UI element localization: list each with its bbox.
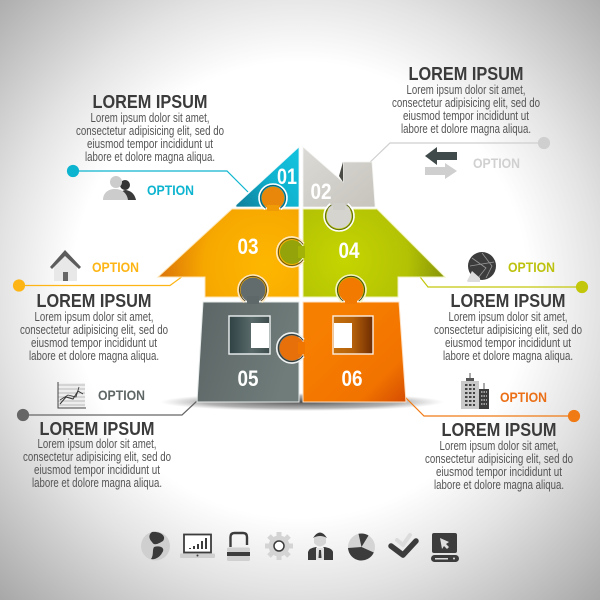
body: Lorem ipsum dolor sit amet, bbox=[90, 111, 210, 125]
body: labore et dolore magna aliqua. bbox=[401, 122, 531, 136]
option label 01: OPTION bbox=[147, 182, 194, 198]
piece 04 bbox=[303, 209, 445, 297]
icon: earth bbox=[141, 532, 170, 560]
connector 03 bbox=[14, 265, 198, 291]
heading: LOREM IPSUM bbox=[408, 63, 524, 84]
puzzle tab: orange into 01 bbox=[259, 184, 287, 211]
house shadow bbox=[160, 393, 444, 411]
body: consectetur adipisicing elit, sed do bbox=[20, 323, 168, 337]
heading: LOREM IPSUM bbox=[442, 419, 556, 440]
bottom icon row bbox=[141, 532, 459, 562]
piece 02 bbox=[303, 147, 375, 207]
puzzle tab: orange into 05 bbox=[277, 333, 305, 363]
piece 06: 06 bbox=[342, 366, 362, 391]
text block: top left bbox=[76, 91, 224, 164]
icon: businessman bbox=[308, 532, 333, 560]
icon: chart bbox=[58, 382, 86, 408]
text block: bottom left bbox=[23, 418, 171, 490]
piece 01: 01 bbox=[277, 164, 297, 189]
icon: globe bbox=[467, 252, 496, 282]
piece 05 bbox=[197, 302, 299, 402]
heading: LOREM IPSUM bbox=[36, 290, 152, 311]
puzzle tab: green into 03 bbox=[277, 237, 305, 267]
icon: people bbox=[103, 176, 136, 200]
icon: computer bbox=[431, 533, 459, 562]
body: eiusmod tempor incididunt ut bbox=[87, 137, 213, 151]
body: consectetur adipisicing elit, sed do bbox=[76, 124, 224, 138]
option label 04: OPTION bbox=[508, 259, 555, 275]
connector lines bbox=[14, 138, 588, 422]
connector 06 bbox=[400, 392, 580, 422]
body: labore et dolore magna aliqua. bbox=[85, 150, 215, 164]
body: consectetur adipisicing elit, sed do bbox=[392, 96, 540, 110]
body bbox=[23, 437, 171, 490]
body: labore et dolore magna aliqua. bbox=[434, 478, 564, 492]
icon: open lock bbox=[227, 533, 250, 561]
icon: arrows bbox=[425, 147, 457, 179]
icon: gear bbox=[265, 532, 293, 560]
window 06 bbox=[333, 316, 373, 354]
icon: pie chart bbox=[348, 533, 375, 561]
heading: LOREM IPSUM bbox=[450, 290, 566, 311]
icon: house bbox=[50, 250, 81, 281]
puzzle tab: grey into 03 bbox=[238, 275, 268, 304]
piece 03 bbox=[158, 209, 299, 297]
text block: middle left bbox=[20, 290, 168, 363]
puzzle tab: grey into 04 bbox=[324, 203, 354, 231]
body: eiusmod tempor incididunt ut bbox=[403, 109, 529, 123]
connector 01 bbox=[68, 166, 248, 192]
piece 01 bbox=[236, 147, 299, 207]
text block: top right bbox=[392, 63, 540, 136]
option label 02: OPTION bbox=[473, 155, 520, 171]
heading: LOREM IPSUM bbox=[92, 91, 208, 112]
icon: laptop chart bbox=[180, 534, 215, 558]
body bbox=[76, 111, 224, 164]
piece 04: 04 bbox=[338, 238, 360, 263]
body bbox=[434, 310, 582, 363]
body: Lorem ipsum dolor sit amet, bbox=[406, 83, 526, 97]
connector 04 bbox=[413, 268, 588, 292]
option label 06: OPTION bbox=[500, 389, 547, 405]
body: eiusmod tempor incididunt ut bbox=[31, 336, 157, 350]
piece 02: 02 bbox=[310, 179, 332, 204]
option label 03: OPTION bbox=[92, 259, 139, 275]
window 05 bbox=[229, 316, 270, 354]
connector 05 bbox=[18, 401, 197, 420]
body: Lorem ipsum dolor sit amet, bbox=[440, 439, 558, 453]
body: eiusmod tempor incididunt ut bbox=[436, 465, 562, 479]
icon: checkmark bbox=[391, 535, 416, 555]
piece 03: 03 bbox=[238, 234, 258, 259]
house puzzle bbox=[158, 147, 445, 402]
icon: buildings bbox=[461, 373, 489, 409]
heading: LOREM IPSUM bbox=[40, 418, 154, 439]
body: Lorem ipsum dolor sit amet, bbox=[34, 310, 154, 324]
body: labore et dolore magna aliqua. bbox=[32, 476, 162, 490]
body: labore et dolore magna aliqua. bbox=[29, 349, 159, 363]
piece 05: 05 bbox=[238, 366, 258, 391]
text block: bottom right bbox=[425, 419, 573, 492]
connector 02 bbox=[365, 138, 550, 167]
body bbox=[425, 439, 573, 492]
puzzle tab: orange into 04 bbox=[336, 275, 366, 304]
body: Lorem ipsum dolor sit amet, bbox=[38, 437, 156, 451]
body: consectetur adipisicing elit, sed do bbox=[23, 450, 171, 464]
body: eiusmod tempor incididunt ut bbox=[34, 463, 160, 477]
option label 05: OPTION bbox=[98, 387, 145, 403]
body bbox=[392, 83, 540, 136]
piece 06 bbox=[303, 302, 406, 402]
body bbox=[20, 310, 168, 363]
body: Lorem ipsum dolor sit amet, bbox=[448, 310, 568, 324]
text block: middle right bbox=[434, 290, 582, 363]
